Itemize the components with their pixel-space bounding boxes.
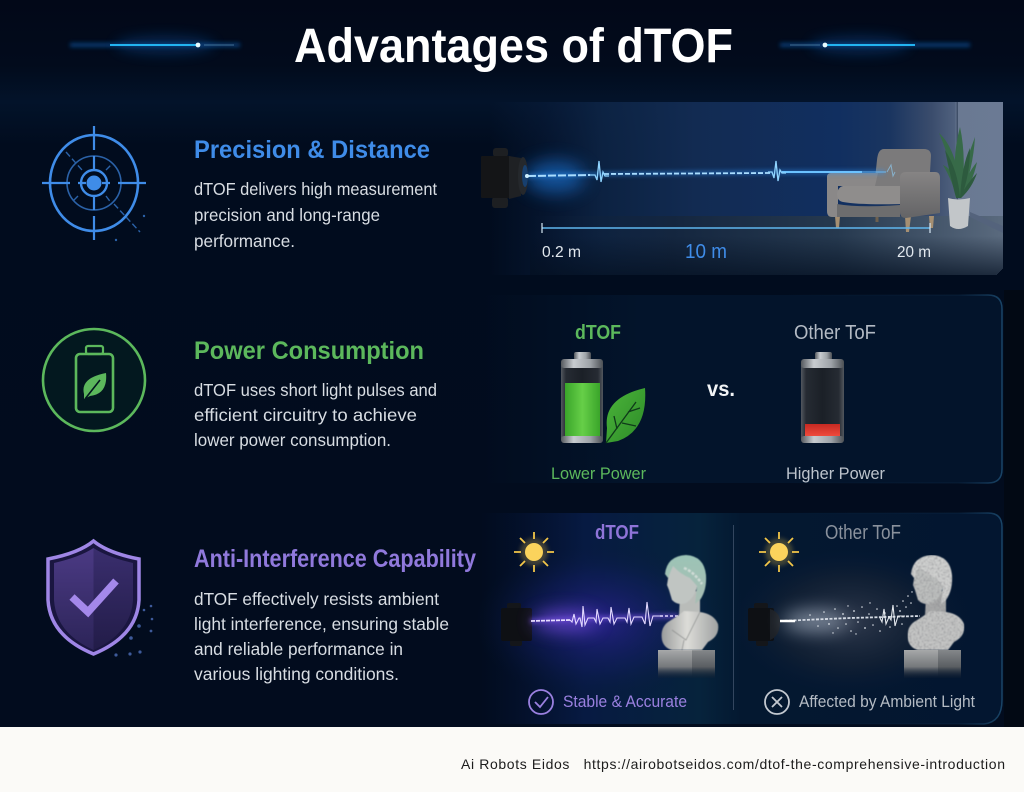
distance ruler [542,223,931,263]
chair [827,149,940,232]
statue left [658,555,718,678]
icon: leaf [606,388,645,443]
text block: dTOF effectively resists ambient [194,589,439,609]
dTOF label: dTOF [595,522,639,544]
distance ruler: 20 m [897,244,931,261]
title glow line left [70,35,240,55]
lower power label: Lower Power [551,464,646,483]
text block: efficient circuitry to achieve [194,405,417,425]
text block [194,380,437,450]
right margin band [1004,290,1024,727]
camera left [501,603,532,646]
scene glow right [730,547,970,697]
icon: sun left [514,532,554,572]
icon: target [42,126,146,241]
text block: dTOF uses short light pulses and [194,380,437,400]
status: affected [765,690,975,714]
status: affected: Affected by Ambient Light [799,692,975,711]
panel: power consumption [43,290,1024,727]
scattered beam [780,591,920,635]
higher power label: Higher Power [786,464,885,483]
panel: precision and distance [42,102,1003,275]
panel frame [480,513,1002,724]
camera right [748,603,780,646]
text block: dTOF delivers high measurement [194,179,437,199]
text block: various lighting conditions. [194,664,399,684]
attribution: Ai Robots Eidos https://airobotseidos.com/dtof-the-comprehensive-introduction [461,756,1005,772]
light beam [525,161,895,193]
footer [0,727,1024,792]
scene glow left [475,542,725,702]
camera sensor [481,148,529,208]
heading: Power Consumption [194,337,424,365]
icon: shield [48,541,153,657]
battery full green [561,352,603,443]
other ToF label: Other ToF [794,322,876,344]
versus label: vs. [707,378,735,401]
room scene [481,102,1003,275]
dTOF label: dTOF [575,322,621,344]
status: stable: Stable & Accurate [563,692,687,711]
panel: anti-interference [48,513,1002,724]
text block [194,179,437,251]
title glow line right [780,35,970,55]
title: Advantages of dTOF [294,20,733,73]
distance ruler: 10 m [685,241,727,263]
text block: performance. [194,231,295,251]
text block: and reliable performance in [194,639,403,659]
other ToF label: Other ToF [825,522,901,544]
heading: Precision & Distance [194,136,430,164]
plant [939,127,977,229]
icon: battery leaf [43,329,145,431]
text block: precision and long-range [194,205,380,225]
status: stable [529,690,687,714]
text block [194,589,449,684]
text block: light interference, ensuring stable [194,614,449,634]
text block: lower power consumption. [194,430,391,450]
statue right [904,555,964,678]
icon: sun right [759,532,799,572]
heading: Anti-Interference Capability [194,545,476,573]
distance ruler: 0.2 m [542,244,581,261]
battery low red [801,352,844,443]
purple beam [530,602,678,631]
divider [733,525,734,710]
panel frame [480,295,1002,483]
